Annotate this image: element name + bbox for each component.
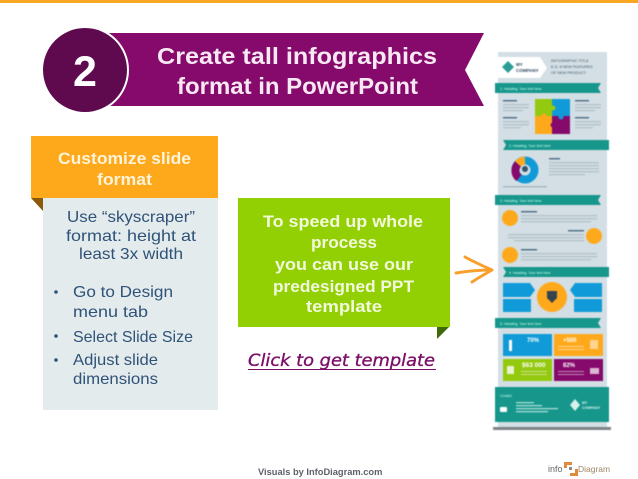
donut chart [515, 160, 534, 180]
preview header: E.G. 8 NEW FEATURES [551, 65, 593, 69]
footer strip [493, 427, 611, 430]
panel heading: Customize slide [58, 149, 191, 168]
section ribbon 2: 2. Heading. Your text here [509, 144, 551, 148]
preview header: MY [516, 62, 523, 67]
statistic tiles: 70% [527, 338, 540, 344]
title banner: 2 [73, 48, 97, 96]
contact block [495, 387, 609, 422]
title banner: Create tall infographics [157, 43, 437, 69]
logo [548, 462, 610, 476]
panel heading: format [97, 170, 152, 189]
bullet list: dimensions [73, 371, 158, 388]
section ribbon 5 [495, 318, 601, 328]
contact block: COMPANY [582, 406, 601, 410]
section ribbon 4 [503, 267, 609, 277]
donut text [549, 158, 599, 175]
section ribbon 3 [495, 195, 601, 205]
statistic tiles [503, 334, 603, 381]
preview header: INFOGRAPHIC TITLE [551, 59, 589, 63]
icon rows [502, 210, 602, 263]
preview header: COMPANY [516, 68, 539, 73]
section ribbon 4: 4. Heading. Your text here [509, 271, 551, 275]
link: click to get template: Click to get template [248, 351, 435, 371]
fold corner [31, 198, 43, 211]
shield graphic [503, 282, 602, 312]
section ribbon 5: 5. Heading. Your text here [500, 322, 542, 326]
section ribbon 2 [503, 140, 609, 150]
donut legend [503, 186, 547, 188]
fold corner [437, 327, 449, 339]
title banner [41, 26, 484, 114]
statistic tiles: $63 000 [522, 362, 546, 369]
callout text: process [311, 233, 377, 252]
intro text: least 3x width [79, 246, 183, 263]
contact block: Contact [500, 394, 512, 398]
callout text: To speed up whole [263, 212, 423, 231]
section ribbon 3: 3. Heading. Your text here [500, 199, 542, 203]
intro text [66, 209, 197, 263]
contact block: MY [582, 401, 588, 405]
intro text: format: height at [66, 228, 197, 245]
statistic tiles: +500 [563, 338, 577, 344]
callout text [263, 212, 423, 316]
infographic template preview [492, 52, 612, 431]
callout text: you can use our [275, 255, 413, 274]
credit text: Visuals by InfoDiagram.com [258, 467, 382, 477]
puzzle side text [503, 100, 601, 128]
preview header [498, 57, 593, 78]
logo text right: Diagram [578, 464, 610, 474]
bullet list: Adjust slide [73, 352, 158, 369]
title banner: format in PowerPoint [177, 73, 418, 99]
preview background [498, 52, 607, 430]
arrow [456, 257, 492, 282]
callout: speed up process [238, 198, 450, 339]
statistic tiles: 82% [563, 363, 576, 369]
bullet list [54, 284, 193, 388]
section ribbon 1 [495, 83, 601, 93]
preview header: OF NEW PRODUCT [551, 71, 587, 75]
logo mark [564, 462, 578, 476]
section ribbon 1: 1. Heading. Your text here [500, 87, 542, 91]
bullet list: menu tab [73, 304, 148, 321]
panel body [43, 198, 218, 410]
panel: customize slide format [31, 136, 218, 410]
callout text: template [306, 297, 382, 316]
callout box [238, 198, 450, 327]
intro text: Use “skyscraper” [67, 209, 195, 226]
bullet list: Go to Design [73, 284, 173, 301]
top accent bar [0, 0, 638, 3]
logo text left: info [548, 464, 563, 474]
bullet list: Select Slide Size [73, 329, 193, 346]
callout text: predesigned PPT [273, 277, 415, 296]
panel heading [31, 136, 218, 198]
puzzle graphic [535, 99, 570, 134]
